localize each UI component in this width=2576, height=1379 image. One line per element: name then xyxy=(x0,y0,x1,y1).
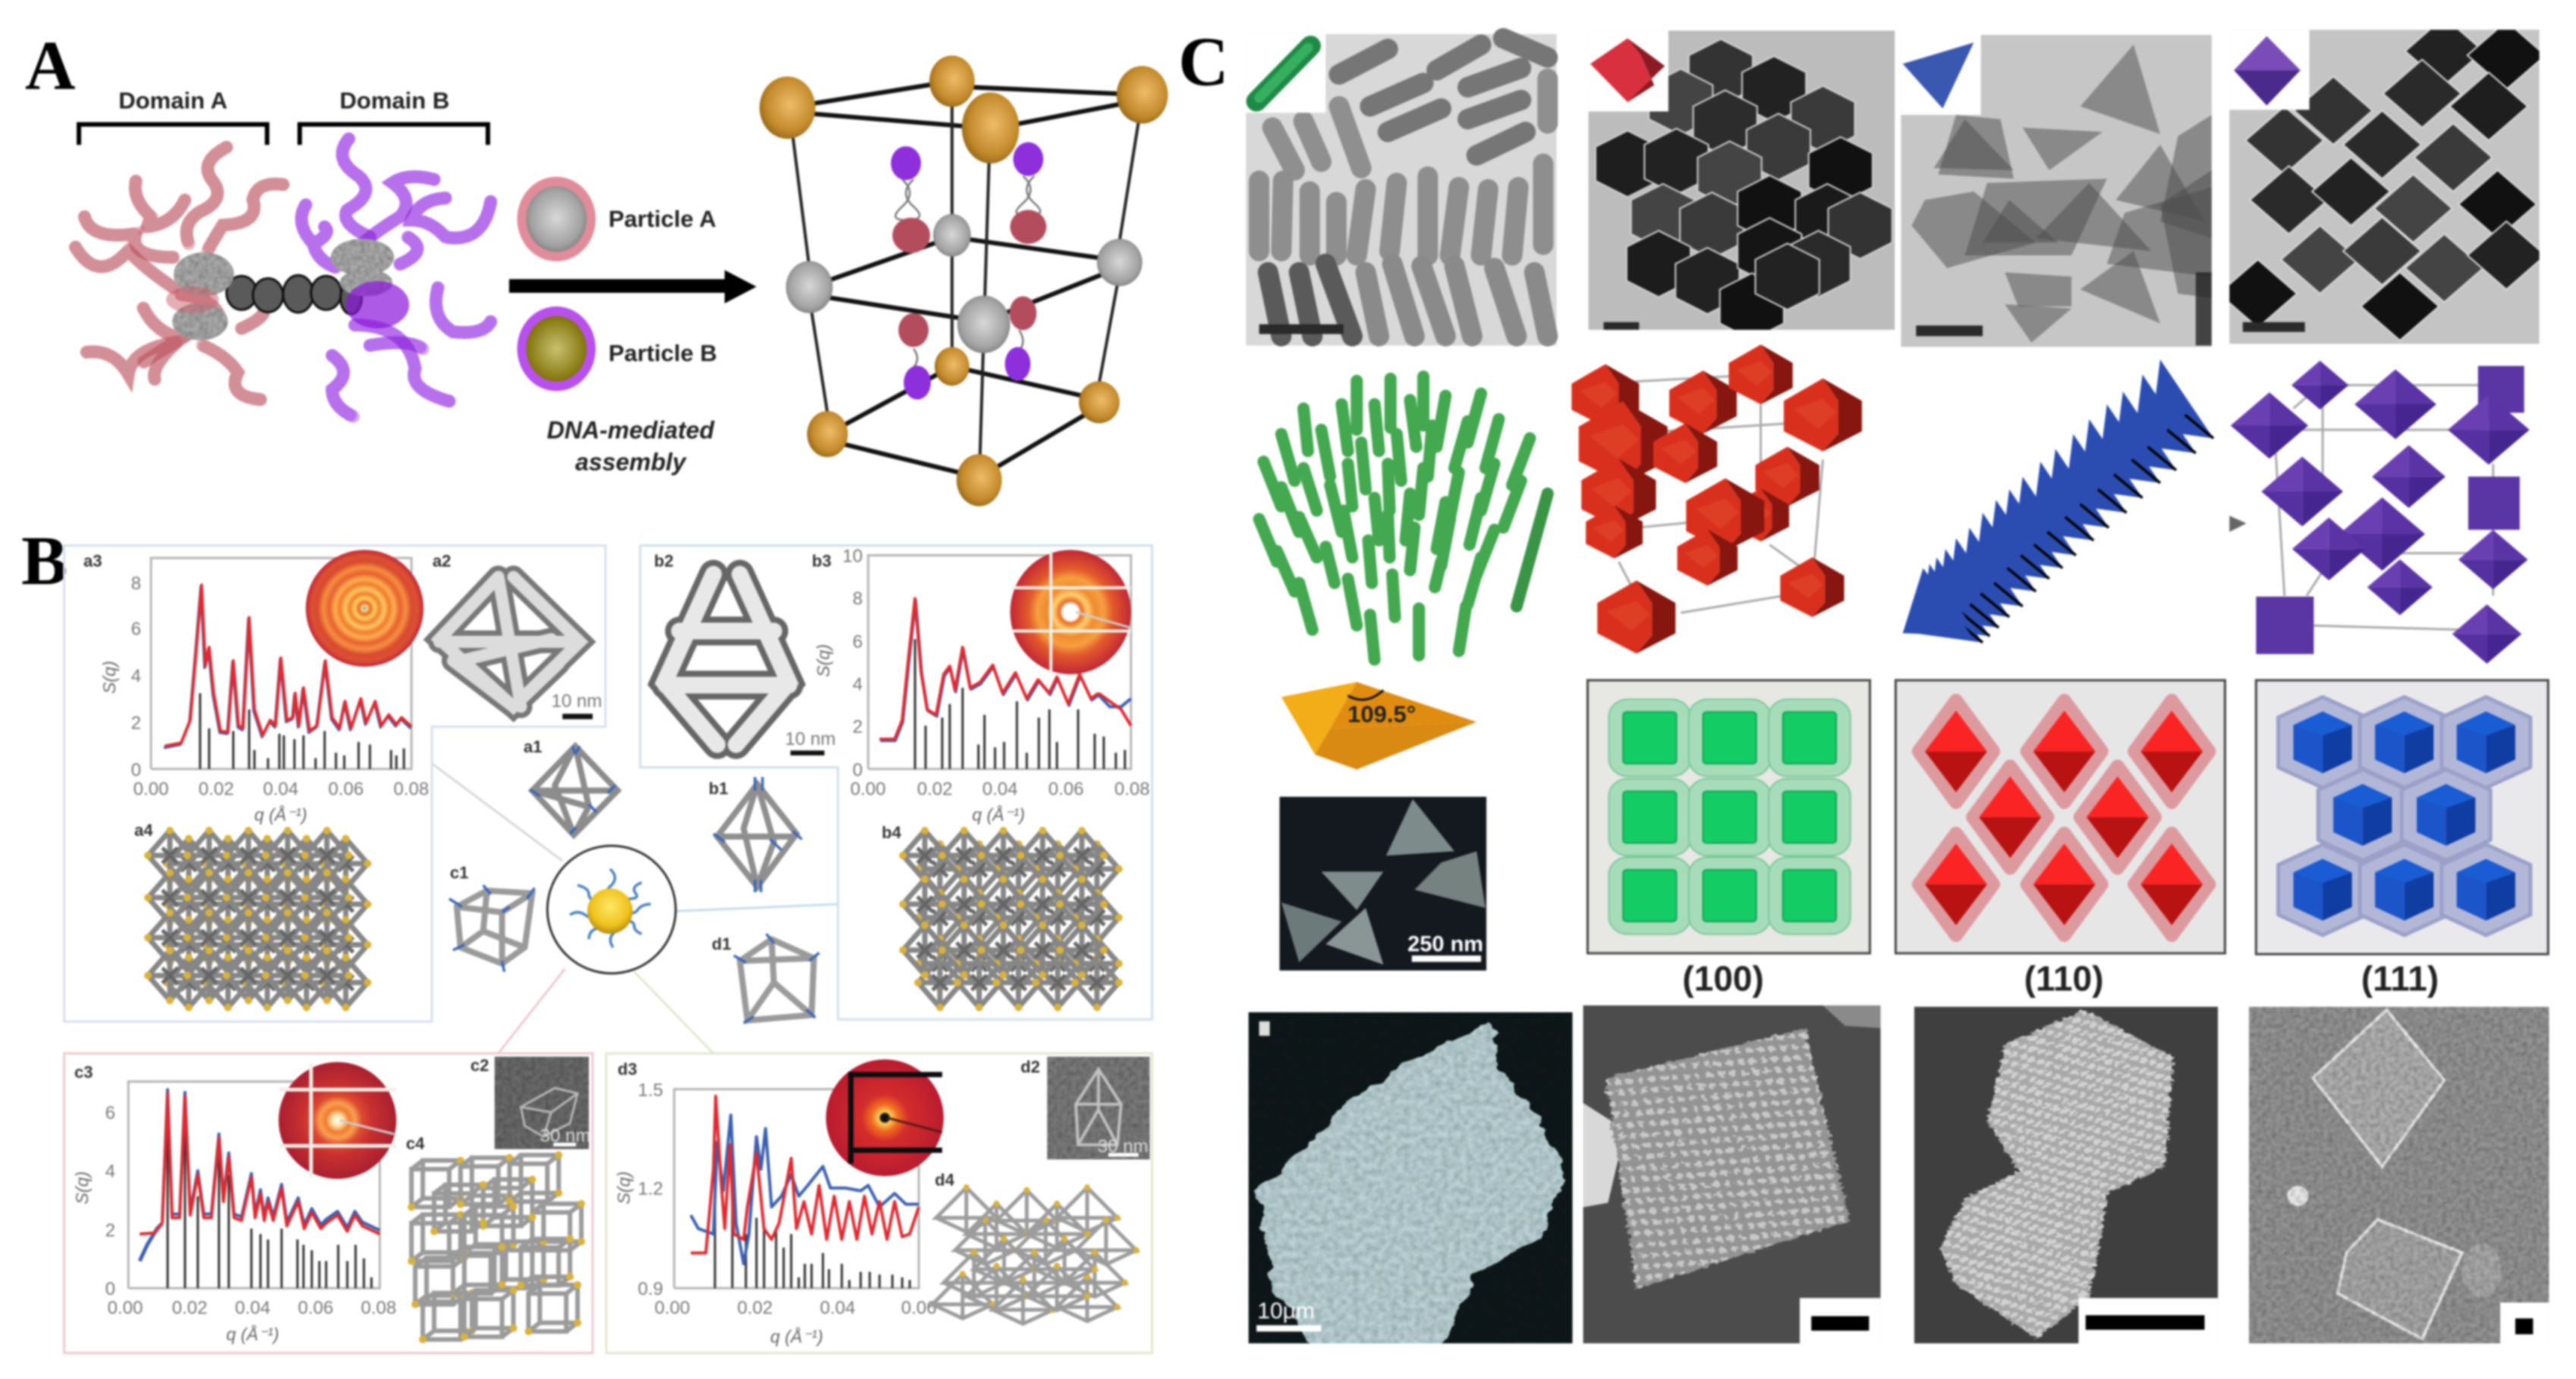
lattice c4: c4 xyxy=(406,1134,425,1153)
chart b3: 0.06 xyxy=(1049,779,1084,799)
image: nanorod TEM xyxy=(1246,34,1556,346)
chart c3: 0.04 xyxy=(235,1298,270,1318)
diagram: (100) square packing xyxy=(1587,680,1870,953)
illustration: purple octahedra lattice xyxy=(2229,361,2530,664)
chart b3: b3 xyxy=(812,551,832,570)
icon: c1 cube frame: c1 xyxy=(450,863,468,882)
image: d2 TEM prism: 30 nm xyxy=(1098,1136,1148,1157)
caption: DNA-mediated assembly: DNA-mediated xyxy=(547,416,716,444)
caption: DNA-mediated assembly: assembly xyxy=(575,448,687,476)
chart d3: q (Å⁻¹) xyxy=(770,1326,823,1346)
image: d2 TEM prism: d2 xyxy=(1021,1057,1040,1076)
chart c3: 0.02 xyxy=(172,1298,207,1318)
panel letter A: A xyxy=(25,27,75,104)
SAXS pattern d3 xyxy=(826,1060,944,1176)
arrow: assembly direction xyxy=(509,270,756,303)
chart a3: 6 xyxy=(131,619,141,639)
image: a2 octahedron reconstruction: 10 nm xyxy=(552,691,602,711)
image: c2 TEM cube: c2 xyxy=(470,1056,489,1075)
bracket: domain brackets xyxy=(79,124,488,145)
frames and connector lines xyxy=(64,545,1152,1353)
chart c3: 6 xyxy=(105,1103,115,1123)
image: rhombic dodecahedra TEM xyxy=(1589,30,1895,340)
chart a3: 0 xyxy=(131,760,141,781)
chart a3: S(q) xyxy=(99,661,119,694)
chart c3: 0.06 xyxy=(298,1298,333,1318)
chart b3: 10 xyxy=(842,546,863,567)
icon: d1 prism frame: d1 xyxy=(712,935,731,953)
label: Particle A: Particle A xyxy=(609,206,716,232)
image: triangular plates TEM xyxy=(1901,35,2212,347)
icon: b1 octahedron frame: b1 xyxy=(709,779,728,798)
chart b3: 0.08 xyxy=(1115,779,1150,799)
chart d3: 0.00 xyxy=(655,1298,690,1318)
chart c3: 2 xyxy=(105,1220,115,1241)
chart a3: 0.04 xyxy=(263,779,298,799)
image: SEM (110) crystal xyxy=(1914,1007,2218,1343)
icon: b1 octahedron frame xyxy=(709,777,802,892)
chart b3: 2 xyxy=(853,717,863,737)
icon: red polyhedron xyxy=(1590,38,1665,102)
chart a3: 0.02 xyxy=(199,779,234,799)
lattice a4: a4 xyxy=(134,821,153,840)
chart a3: 0.08 xyxy=(394,779,429,799)
panel letter B: B xyxy=(21,522,68,599)
caption: DNA-mediated assembly xyxy=(547,416,716,476)
illustration: red polyhedra lattice xyxy=(1571,344,1862,654)
lattice d4 xyxy=(933,1170,1139,1324)
icon: c1 cube frame xyxy=(449,863,534,972)
chart a3: 8 xyxy=(131,573,141,594)
label: (111): (111) xyxy=(2361,959,2439,998)
diagram: (111) hexagonal packing xyxy=(2256,680,2548,954)
image: tetrahedra SEM xyxy=(1279,796,1486,970)
chart b3: 0 xyxy=(853,760,863,781)
image: d2 TEM prism xyxy=(1021,1057,1150,1160)
chart a3 xyxy=(83,550,429,825)
illustration: green nanorod superlattice xyxy=(1259,376,1548,660)
panel A: DNA-mediated assembly xyxy=(25,27,1168,506)
lattice b4: b4 xyxy=(882,823,901,842)
image: c2 TEM cube: 30 nm xyxy=(540,1126,590,1146)
icon: blue triangle xyxy=(1903,42,1974,108)
label: Particle B: Particle B xyxy=(609,340,717,366)
chart b3: 0.04 xyxy=(983,779,1018,799)
image: SEM rough aggregate: 10μm xyxy=(1257,1299,1315,1324)
chart c3: S(q) xyxy=(72,1171,92,1205)
heading: Domain B: Domain B xyxy=(340,87,449,114)
heading: Domain A: Domain A xyxy=(118,87,228,114)
icon: a1 octahedron frame xyxy=(524,737,618,835)
label: (100): (100) xyxy=(1682,959,1764,998)
chart b3: 8 xyxy=(853,589,863,609)
icon: Particle A xyxy=(517,177,596,262)
chart b3: 6 xyxy=(853,632,863,652)
chart a3: q (Å⁻¹) xyxy=(254,804,307,825)
chart c3: 0 xyxy=(105,1279,115,1299)
chart b3: 0.00 xyxy=(851,779,885,799)
chart b3 xyxy=(812,546,1150,825)
panel C: anisotropic nanoparticle crystals xyxy=(1178,17,2549,1352)
label: (110): (110) xyxy=(2024,959,2103,998)
image: octahedra TEM xyxy=(2219,17,2546,344)
panel letter C: C xyxy=(1178,23,1228,100)
illustration: blue triangular plate stack xyxy=(1903,360,2213,642)
chart d3: 0.9 xyxy=(638,1279,663,1299)
illustration: gold tetrahedron with 109.5 degree angle: 109.5° xyxy=(1348,701,1416,727)
illustration: gold tetrahedron with 109.5 degree angle xyxy=(1282,682,1477,770)
image: b2 octahedron reconstruction: b2 xyxy=(654,551,674,570)
icon: purple octahedron xyxy=(2234,36,2301,105)
lattice c4 xyxy=(406,1134,585,1343)
chart b3: 4 xyxy=(853,674,863,695)
chart b3: S(q) xyxy=(813,644,833,677)
illustration: binary superlattice unit cell xyxy=(760,55,1168,506)
lattice b4 xyxy=(882,823,1123,1011)
icon: a1 octahedron frame: a1 xyxy=(524,737,542,756)
chart a3: 2 xyxy=(131,713,141,733)
chart d3: 0.02 xyxy=(738,1298,772,1318)
illustration: DNA-tethered bivalent origami xyxy=(76,139,491,416)
chart a3: 0.00 xyxy=(134,779,168,799)
lattice a4 xyxy=(134,821,372,1011)
chart d3: 1.2 xyxy=(638,1179,663,1199)
image: SEM (111) crystal xyxy=(2249,1007,2549,1343)
panel B: origami frame lattices xyxy=(21,522,1152,1353)
SAXS pattern a3 xyxy=(306,550,423,667)
chart d3: 1.5 xyxy=(638,1080,663,1101)
chart c3: 0.00 xyxy=(108,1298,143,1318)
SAXS pattern c3 xyxy=(278,1062,396,1179)
image: a2 octahedron reconstruction xyxy=(432,551,602,719)
chart c3: 0.08 xyxy=(361,1298,396,1318)
chart c3: q (Å⁻¹) xyxy=(226,1324,279,1344)
image: SEM (100) crystal xyxy=(1583,1006,1880,1343)
SAXS pattern b3 xyxy=(1010,550,1132,674)
chart b3: 0.02 xyxy=(917,779,952,799)
chart a3: 0.06 xyxy=(329,779,363,799)
image: b2 octahedron reconstruction xyxy=(654,551,835,755)
chart d3: S(q) xyxy=(614,1171,634,1205)
image: SEM rough aggregate xyxy=(1248,1012,1572,1352)
icon: Particle B xyxy=(517,306,596,391)
diagram: (110) rhombic packing xyxy=(1895,680,2225,953)
icon: d1 prism frame xyxy=(712,934,819,1023)
chart c3 xyxy=(72,1062,396,1344)
chart b3: q (Å⁻¹) xyxy=(972,804,1025,825)
icon: green rod xyxy=(1257,46,1310,102)
image: a2 octahedron reconstruction: a2 xyxy=(432,551,451,570)
image: b2 octahedron reconstruction: 10 nm xyxy=(785,729,835,749)
lattice d4: d4 xyxy=(935,1170,955,1189)
chart d3: d3 xyxy=(618,1060,637,1079)
chart a3: a3 xyxy=(83,551,102,570)
chart d3: 0.04 xyxy=(820,1298,855,1318)
chart d3: 0.06 xyxy=(901,1298,936,1318)
chart c3: 4 xyxy=(105,1161,115,1182)
chart a3: 4 xyxy=(131,666,141,686)
chart d3 xyxy=(614,1060,944,1346)
chart c3: c3 xyxy=(74,1063,93,1082)
image: tetrahedra SEM: 250 nm xyxy=(1408,932,1483,957)
icon: central DNA-functionalised gold nanoparticle xyxy=(547,846,676,973)
image: c2 TEM cube xyxy=(470,1056,590,1149)
